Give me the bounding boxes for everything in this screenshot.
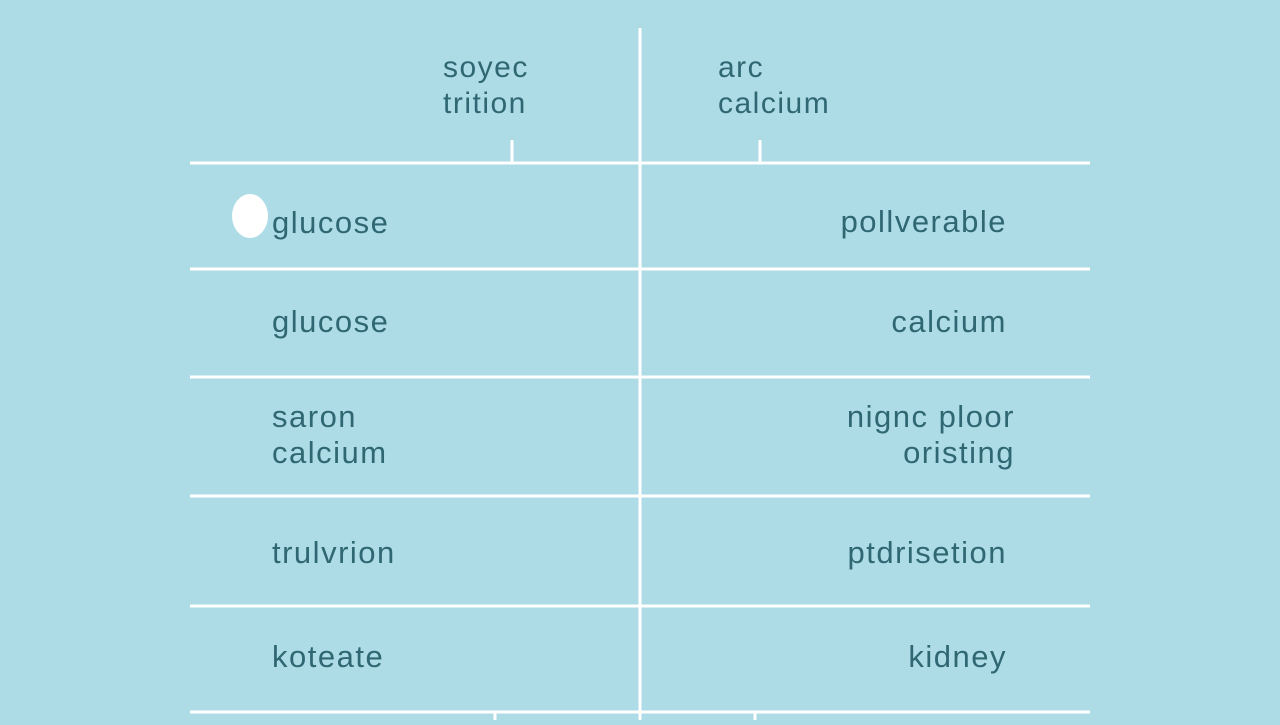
header: right column: arc	[718, 51, 764, 84]
left column entries: trulvrion	[272, 535, 396, 570]
right column entries: oristing	[903, 435, 1015, 470]
left column entries: glucose	[272, 304, 389, 339]
icon: white dot	[232, 194, 268, 238]
right column entries: ptdrisetion	[847, 535, 1007, 570]
left column entries: calcium	[272, 435, 388, 470]
right column entries: calcium	[891, 304, 1007, 339]
right column entries: nignc ploor	[847, 399, 1015, 434]
left column entries: koteate	[272, 639, 384, 674]
right column entries: kidney	[908, 639, 1007, 674]
header: left column	[443, 51, 529, 120]
header: left column: trition	[443, 87, 527, 120]
right column entries: pollverable	[841, 204, 1007, 239]
left column entries: saron	[272, 399, 357, 434]
left column entries: glucose	[272, 205, 389, 240]
header: left column: soyec	[443, 51, 529, 84]
left column entries	[272, 205, 396, 674]
right column entries	[841, 204, 1015, 674]
header: right column: calcium	[718, 87, 830, 120]
header: right column	[718, 51, 830, 120]
